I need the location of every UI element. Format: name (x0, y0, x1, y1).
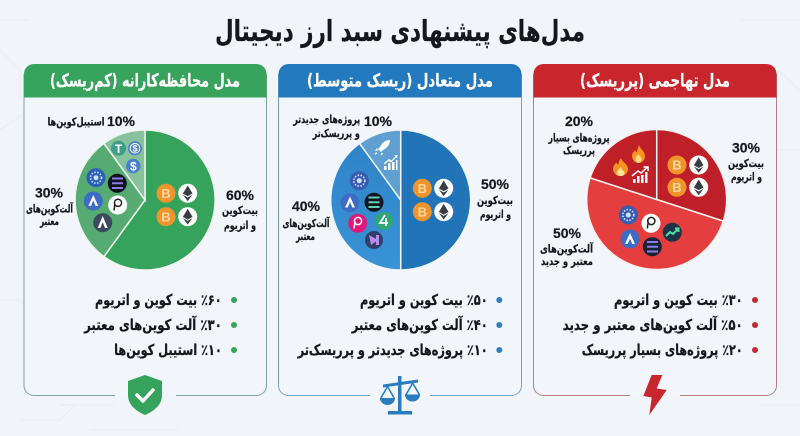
allocation list: moderate: ٪۴۰ آلت کوین‌های معتبر (351, 316, 488, 334)
icon: bitcoin and ethereum coins (413, 179, 453, 221)
allocation list: aggressive: ٪۳۰ بیت کوین و اتریوم (614, 291, 743, 309)
icon: stablecoins: $ (130, 159, 137, 173)
allocation list: moderate (297, 291, 502, 360)
pie chart: moderate (331, 130, 471, 270)
label: 10% newer projects (292, 113, 393, 140)
label: 50% bitcoin and ethereum: و اتریوم (480, 208, 511, 221)
pie chart: aggressive (587, 130, 727, 270)
panel header: moderate: مدل متعادل (ریسک متوسط) (307, 70, 493, 92)
label: 10% newer projects: 10% (364, 113, 393, 129)
icon: bitcoin and ethereum coins: B (672, 158, 682, 173)
icon: bitcoin and ethereum coins: B (672, 180, 682, 195)
label: 10% newer projects: پروژه‌های جدیدتر (292, 113, 360, 126)
label: 40% altcoins: معتبر (295, 230, 315, 243)
label: 30% bitcoin and ethereum: بیت‌کوین (728, 157, 764, 170)
icon: rocket and growth chart (374, 140, 398, 170)
icon: bitcoin and ethereum coins: B (418, 181, 427, 196)
icon: stablecoins: T (115, 142, 123, 156)
panel header: conservative (24, 64, 266, 98)
label: 50% altcoins (540, 225, 593, 268)
label: 40% altcoins: 40% (292, 198, 321, 214)
label: 30% altcoins: آلت‌کوین‌های (26, 202, 73, 216)
label: 30% altcoins: معتبر (39, 215, 59, 228)
allocation list: conservative (83, 291, 237, 359)
icon: shield with check (128, 375, 162, 415)
label: 50% altcoins: 50% (553, 225, 582, 241)
label: 30% bitcoin and ethereum (728, 140, 764, 184)
allocation list: conservative: ٪۱۰ استیبل کوین‌ها (114, 341, 222, 359)
panel: moderate model (278, 64, 522, 414)
label: 30% altcoins: 30% (35, 184, 64, 200)
label: 30% altcoins (26, 184, 73, 228)
pie chart: conservative (75, 130, 215, 270)
icon: lightning bolt (643, 375, 667, 415)
icon: bitcoin and ethereum coins: B (161, 186, 171, 201)
label: 50% bitcoin and ethereum (477, 176, 513, 221)
icon: bitcoin and ethereum coins: B (161, 209, 171, 224)
label: 40% altcoins (282, 198, 330, 243)
icon: altcoins (619, 206, 682, 256)
icon: balance scale (380, 376, 420, 414)
label: 20% very risky projects (548, 113, 610, 157)
panel header: conservative: مدل محافظه‌کارانه (کم‌ریسک) (50, 70, 240, 92)
icon: bitcoin and ethereum coins: B (418, 204, 427, 219)
label: 10% newer projects: و پرریسک‌تر (312, 127, 360, 140)
label: 30% bitcoin and ethereum: 30% (732, 140, 761, 156)
label: 10% stablecoins: 10% (107, 113, 136, 129)
icon: bitcoin and ethereum coins (668, 156, 708, 197)
label: 10% stablecoins: استیبل‌کوین‌ها (48, 116, 104, 128)
allocation list: aggressive: ٪۵۰ آلت کوین‌های معتبر و جدید (563, 316, 743, 334)
label: 60% bitcoin and ethereum (222, 187, 258, 232)
label: 60% bitcoin and ethereum: و اتریوم (224, 219, 256, 232)
label: 50% bitcoin and ethereum: بیت‌کوین (477, 194, 513, 207)
icon: bitcoin and ethereum coins (156, 184, 197, 226)
label: 40% altcoins: آلت‌کوین‌های (282, 216, 330, 230)
label: 50% altcoins: آلت‌کوین‌های (540, 242, 593, 256)
panel header: aggressive: مدل تهاجمی (پرریسک) (580, 70, 730, 92)
panel: conservative model (24, 64, 266, 415)
icon: established altcoins (340, 171, 393, 249)
icon: established altcoins (84, 168, 127, 232)
title: مدل‌های پیشنهادی سبد ارز دیجیتال (215, 14, 585, 49)
allocation list: conservative: ٪۳۰ آلت کوین‌های معتبر (83, 316, 222, 334)
icon: flames and growth chart (613, 145, 648, 183)
label: 30% bitcoin and ethereum: و اتریوم (731, 170, 762, 184)
allocation list: moderate: ٪۱۰ پروژه‌های جدیدتر و پرریسک‌تر (297, 341, 488, 360)
allocation list: conservative: ٪۶۰ بیت کوین و اتریوم (95, 291, 222, 309)
label: 20% very risky projects: 20% (565, 113, 594, 129)
allocation list: moderate: ٪۵۰ بیت کوین و اتریوم (360, 291, 488, 309)
icon: stablecoins (111, 141, 142, 173)
panel header: moderate (278, 64, 522, 98)
panel: aggressive model (534, 64, 776, 415)
panel header: aggressive (534, 64, 776, 98)
label: 60% bitcoin and ethereum: بیت‌کوین (222, 204, 258, 217)
allocation list: aggressive: ٪۲۰ پروژه‌های بسیار پرریسک (582, 341, 743, 360)
label: 20% very risky projects: پرریسک (563, 144, 595, 157)
allocation list: aggressive (563, 291, 758, 360)
label: 50% bitcoin and ethereum: 50% (481, 176, 510, 192)
label: 50% altcoins: معتبر و جدید (541, 255, 593, 268)
icon: stablecoins: $ (132, 144, 138, 154)
label: 60% bitcoin and ethereum: 60% (226, 187, 255, 203)
label: 20% very risky projects: پروژه‌های بسیار (548, 132, 610, 144)
